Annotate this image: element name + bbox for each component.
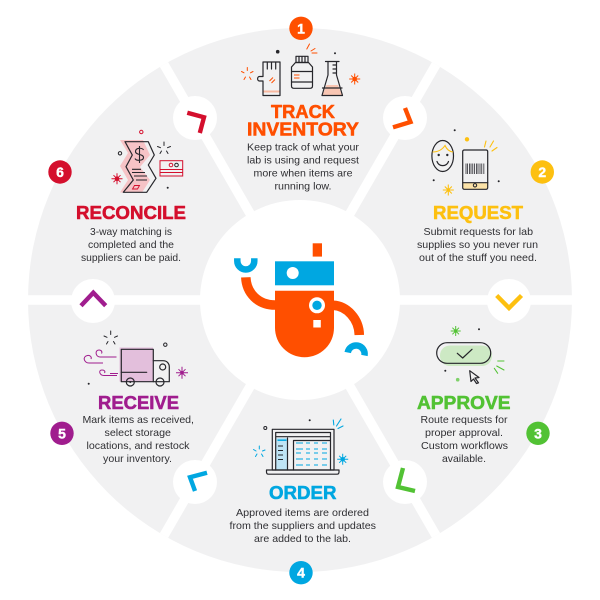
heading: request: REQUEST [433,202,524,223]
text: track inventory description: lab is using and request [247,156,359,166]
text: request description: Submit requests for lab [424,227,533,238]
icon: laptop with order screen [254,419,348,474]
step 4 number: 4 [297,565,305,581]
text: track inventory description: Keep track of what your [247,142,360,154]
icon: face and barcode phone [432,129,500,196]
text: receive description: your inventory. [103,454,172,465]
text: reconcile description: completed and the [88,240,174,251]
icon: delivery truck [84,331,188,386]
heading: reconcile: RECONCILE [76,202,186,223]
text: approve description: Route requests for [420,415,508,426]
step 4 number [289,561,313,584]
text: approve description: available. [442,454,486,465]
step 1 number [289,17,313,40]
step 3 number: 3 [534,425,542,441]
text: order description: are added to the lab. [254,534,351,545]
step 5 number: 5 [58,425,66,441]
text: receive description [82,415,194,465]
text: track inventory description: running low. [274,182,332,192]
text: request description: out of the stuff you need. [419,253,537,264]
text: approve description [420,415,508,465]
heading: order: ORDER [269,482,336,503]
step 6 number: 6 [56,164,64,180]
icon: gloves, jar and flask [242,44,360,96]
heading: track inventory [247,101,360,139]
step 5 number [50,422,74,445]
text: approve description: proper approval. [425,428,503,439]
text: track inventory description: more when items are [254,168,353,180]
text: order description [230,508,376,545]
icon: approve toggle and cursor [437,326,504,384]
text: reconcile description: 3-way matching is [90,227,172,238]
heading: approve: APPROVE [417,392,510,413]
text: receive description: locations, and restock [86,441,190,452]
icon: invoice and payment card [112,130,183,192]
heading: receive: RECEIVE [98,392,179,413]
text: reconcile description [81,227,181,264]
chevron arrows [81,108,522,491]
text: reconcile description: suppliers can be paid. [81,253,181,264]
text: approve description: Custom workflows [421,441,508,452]
heading: track inventory: TRACK [271,101,336,122]
robot mascot [237,243,365,357]
text: request description [417,227,538,264]
text: request description: supplies so you never run [417,240,538,251]
step 3 number [526,422,550,445]
text: order description: from the suppliers and updates [230,521,376,532]
step 2 number [531,160,554,184]
step 6 number [48,160,72,184]
text: receive description: select storage [104,428,171,439]
text: order description: Approved items are ordered [236,508,369,519]
heading: track inventory: INVENTORY [247,118,360,139]
text: receive description: Mark items as received, [82,415,194,426]
text: track inventory description [247,142,360,192]
step 2 number: 2 [538,164,546,180]
step 1 number: 1 [297,20,305,36]
